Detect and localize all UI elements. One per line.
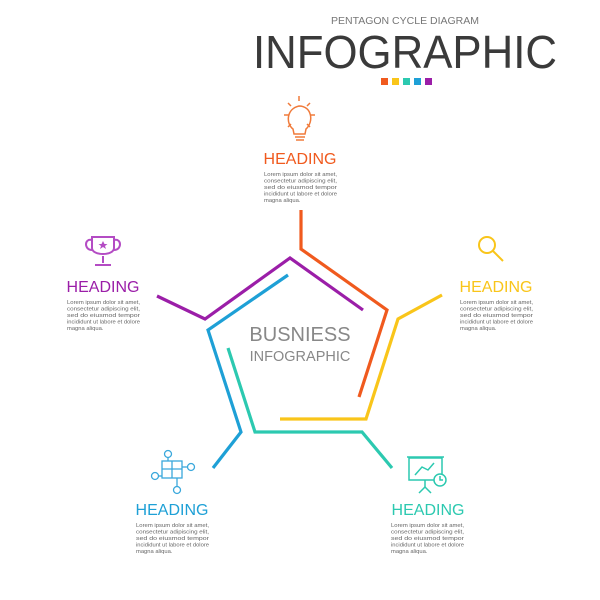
text block: top: consectetur adipiscing elit, <box>264 178 337 184</box>
text block: bottom left: incididunt ut labore et dolore <box>136 542 209 548</box>
center text: INFOGRAPHIC <box>250 349 350 365</box>
pentagon cycle lines <box>157 210 442 468</box>
text block: bottom right: Lorem ipsum dolor sit amet, <box>391 523 464 529</box>
text block: right: sed do eiusmod tempor <box>460 313 533 319</box>
text block: bottom left: magna aliqua. <box>136 549 173 555</box>
text block: left: Lorem ipsum dolor sit amet, <box>67 300 140 306</box>
text block: bottom right: magna aliqua. <box>391 549 428 555</box>
text block: left: magna aliqua. <box>67 326 104 332</box>
color squares <box>381 78 432 85</box>
text block: left: sed do eiusmod tempor <box>67 313 140 319</box>
text block: right: consectetur adipiscing elit, <box>460 306 533 312</box>
icon: trophy <box>86 237 120 265</box>
text block: bottom right <box>391 523 464 555</box>
title: INFOGRAPHIC <box>253 26 557 78</box>
text block: right: Lorem ipsum dolor sit amet, <box>460 300 533 306</box>
text block: bottom right: incididunt ut labore et dolore <box>391 542 464 548</box>
text block: top: incididunt ut labore et dolore <box>264 192 337 198</box>
text block: left: incididunt ut labore et dolore <box>67 320 140 326</box>
text block: bottom left <box>136 523 209 555</box>
icon: puzzle network <box>152 450 194 494</box>
text block: bottom left: Lorem ipsum dolor sit amet, <box>136 523 209 529</box>
text block: right: magna aliqua. <box>460 326 497 332</box>
text block: right: incididunt ut labore et dolore <box>460 320 533 326</box>
text block: right <box>460 300 533 332</box>
heading: top: HEADING <box>264 151 336 168</box>
text block: left <box>67 300 140 332</box>
center text: BUSNIESS <box>249 324 351 346</box>
heading: bottom left: HEADING <box>136 502 208 519</box>
icon: magnifier <box>479 237 503 261</box>
icon: light bulb <box>284 96 315 140</box>
subtitle: PENTAGON CYCLE DIAGRAM <box>331 15 479 27</box>
heading: right: HEADING <box>460 279 532 296</box>
icon: presentation board <box>407 457 446 493</box>
text block: left: consectetur adipiscing elit, <box>67 306 140 312</box>
text block: bottom right: consectetur adipiscing elit, <box>391 530 464 536</box>
text block: top: sed do eiusmod tempor <box>264 185 337 191</box>
text block: bottom left: consectetur adipiscing elit, <box>136 530 209 536</box>
text block: top: Lorem ipsum dolor sit amet, <box>264 172 337 178</box>
heading: bottom right: HEADING <box>392 502 464 519</box>
center text <box>249 324 351 365</box>
text block: bottom right: sed do eiusmod tempor <box>391 536 464 542</box>
text block: bottom left: sed do eiusmod tempor <box>136 536 209 542</box>
text block: top: magna aliqua. <box>264 198 301 204</box>
heading: left: HEADING <box>67 279 139 296</box>
text block: top <box>264 172 337 204</box>
